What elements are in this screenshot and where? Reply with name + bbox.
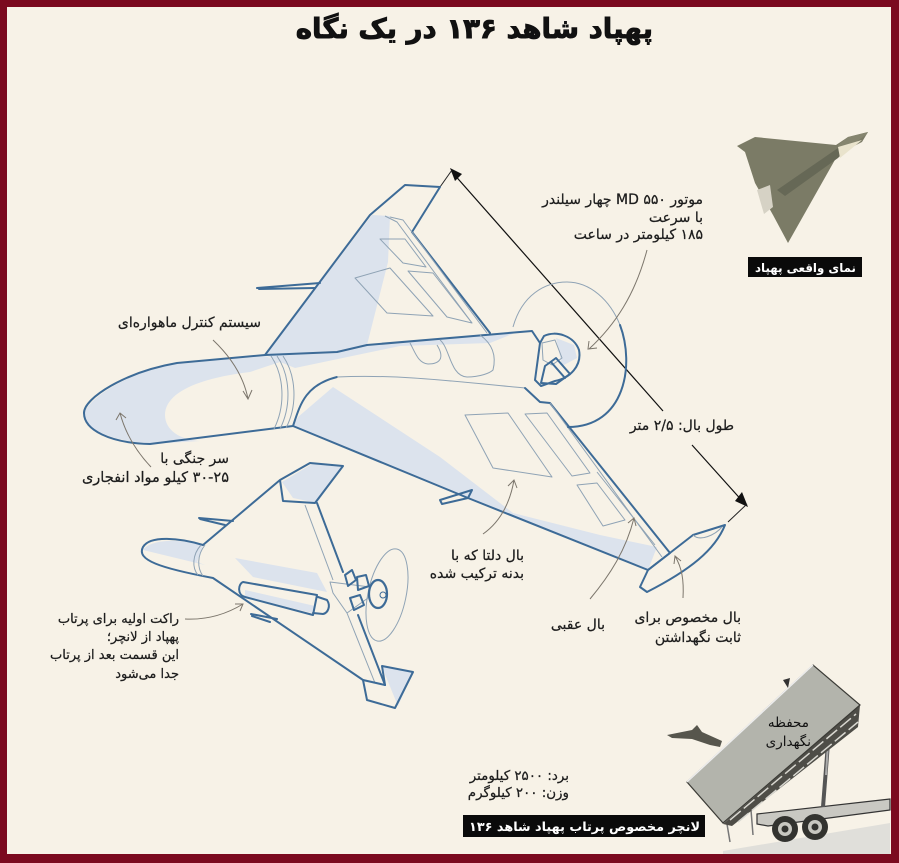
wing panels (355, 239, 625, 526)
label: warhead (82, 413, 229, 486)
label: rear wing: بال عقبی (551, 617, 605, 633)
ground (723, 823, 890, 854)
label: booster rocket: جدا می‌شود (115, 667, 179, 682)
label: delta wing: بال دلتا که با (451, 548, 524, 564)
title: پهپاد شاهد ۱۳۶ در یک نگاه (296, 12, 653, 45)
label: warhead: ۳۰-۲۵ کیلو مواد انفجاری (82, 470, 229, 486)
main drone illustration (84, 168, 748, 592)
real photo of the drone (737, 132, 868, 243)
label: stabilizer fin (634, 556, 741, 646)
label: stabilizer fin: بال مخصوص برای (634, 610, 741, 626)
engine and propeller (513, 282, 626, 427)
label: range and weight: برد: ۲۵۰۰ کیلومتر (469, 769, 569, 784)
label: engine: با سرعت (649, 210, 703, 226)
label: engine: ۱۸۵ کیلومتر در ساعت (574, 227, 703, 243)
booster rocket (239, 582, 329, 615)
storage container: نگهداری (766, 733, 811, 750)
label: booster rocket: راکت اولیه برای پرتاب (58, 612, 179, 627)
shading (143, 464, 413, 706)
second drone illustration with booster (142, 463, 415, 708)
trailer (727, 743, 890, 842)
launcher caption (463, 815, 705, 837)
label: booster rocket: این قسمت بعد از پرتاب (50, 648, 179, 663)
wing span dimension line (440, 168, 748, 522)
photo caption (748, 257, 862, 277)
label: rear wing (551, 518, 636, 633)
label: wing span: طول بال: ۲/۵ متر (629, 418, 734, 434)
label: engine (541, 192, 703, 349)
label: range and weight: وزن: ۲۰۰ کیلوگرم (468, 785, 569, 801)
storage container: محفظه (768, 715, 809, 731)
label: delta wing: بدنه ترکیب شده (430, 566, 524, 582)
label: range and weight (468, 769, 569, 801)
label: booster rocket (50, 604, 243, 682)
label: delta wing (430, 480, 524, 582)
label: satellite control (118, 315, 261, 399)
label: booster rocket: پهپاد از لانچر؛ (107, 630, 179, 645)
label: satellite control: سیستم کنترل ماهواره‌ای (118, 315, 261, 331)
airframe outlines (142, 463, 413, 708)
photo caption: نمای واقعی پهپاد (755, 261, 856, 276)
small drone silhouette (667, 725, 722, 747)
fuselage and wing outlines (84, 185, 725, 592)
label: warhead: سر جنگی با (160, 450, 229, 467)
engine and propeller (330, 545, 415, 645)
shading (84, 215, 657, 570)
label: engine: موتور MD ۵۵۰ چهار سیلندر (541, 192, 703, 208)
launcher caption: لانچر مخصوص پرتاب پهپاد شاهد ۱۳۶ (469, 820, 700, 835)
label: stabilizer fin: ثابت نگهداشتن (655, 629, 741, 646)
launcher truck illustration (667, 665, 890, 854)
storage container (687, 665, 860, 826)
